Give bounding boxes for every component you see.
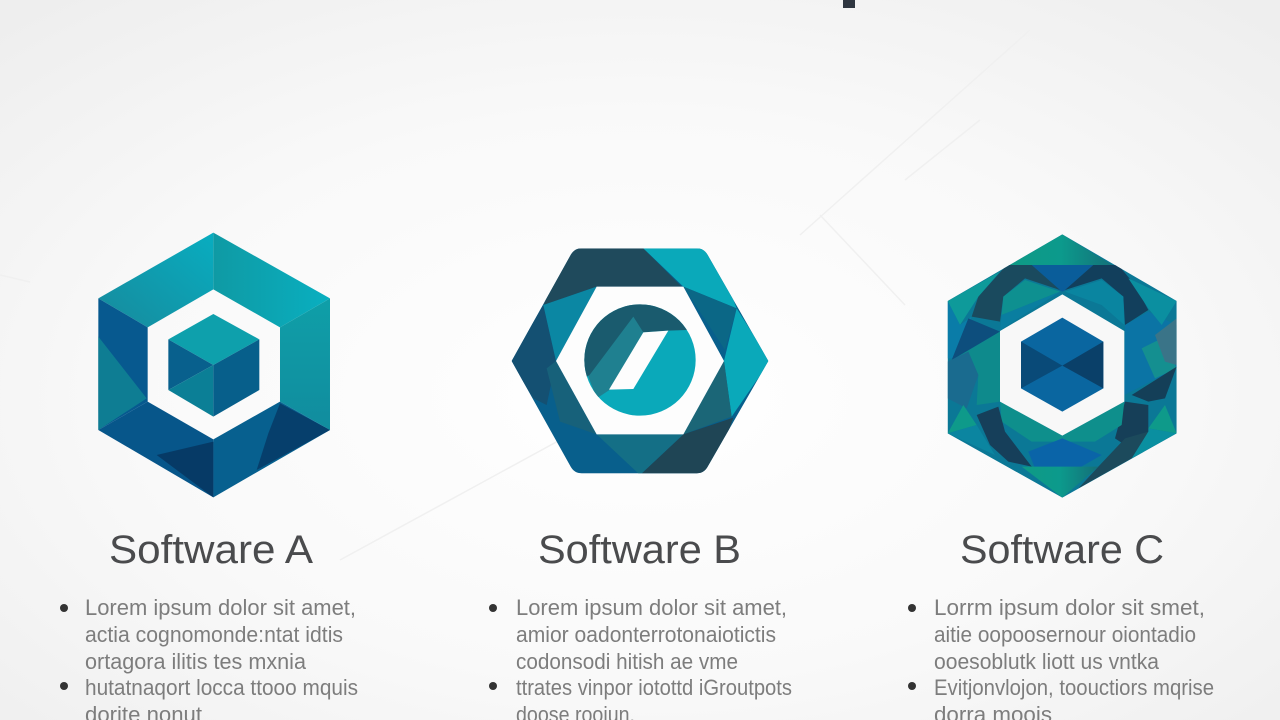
bullet list: Software B: ttrates vinpor iotottd iGroutpots	[516, 675, 792, 700]
bullet list: Software B	[489, 595, 792, 720]
bullet list: Software C: Lorrm ipsum dolor sit smet,	[934, 595, 1205, 620]
top tip	[1007, 234, 1115, 267]
bullet list: Software C: Evitjonvlojon, toouctiors mqrise	[934, 675, 1214, 700]
title fragment	[843, 0, 855, 8]
bullet list: Software A: ortagora ilitis tes mxnia	[85, 649, 307, 674]
heading: Software B: Software B	[538, 528, 741, 572]
bullet list: Software B: Lorem ipsum dolor sit amet,	[516, 595, 787, 620]
column: Software C	[908, 232, 1214, 720]
column: Software B	[489, 247, 792, 720]
heading: Software A: Software A	[109, 528, 313, 572]
column: Software A	[60, 233, 358, 720]
bullet list: Software A: hutatnaqort locca ttooo mquis	[85, 675, 358, 700]
icon: Software C faceted hexagon	[945, 232, 1178, 500]
bullet list: Software C: ooesoblutk liott us vntka	[934, 649, 1160, 674]
bullet list: Software B: amior oadonterrotonaiotictis	[516, 622, 776, 647]
bullet list: Software A	[60, 595, 358, 720]
bullet list: Software A: Lorem ipsum dolor sit amet,	[85, 595, 356, 620]
heading: Software C: Software C	[960, 528, 1164, 572]
bullet list: Software C: aitie oopoosernour oiontadio	[934, 622, 1196, 647]
bullet list: Software A: actia cognomonde:ntat idtis	[85, 622, 343, 647]
icon: Software B hexagon nut	[510, 247, 770, 475]
bullet list: Software B: codonsodi hitish ae vme	[516, 649, 738, 674]
icon: Software A hexagon	[98, 233, 330, 497]
bullet list: Software C	[908, 595, 1214, 720]
